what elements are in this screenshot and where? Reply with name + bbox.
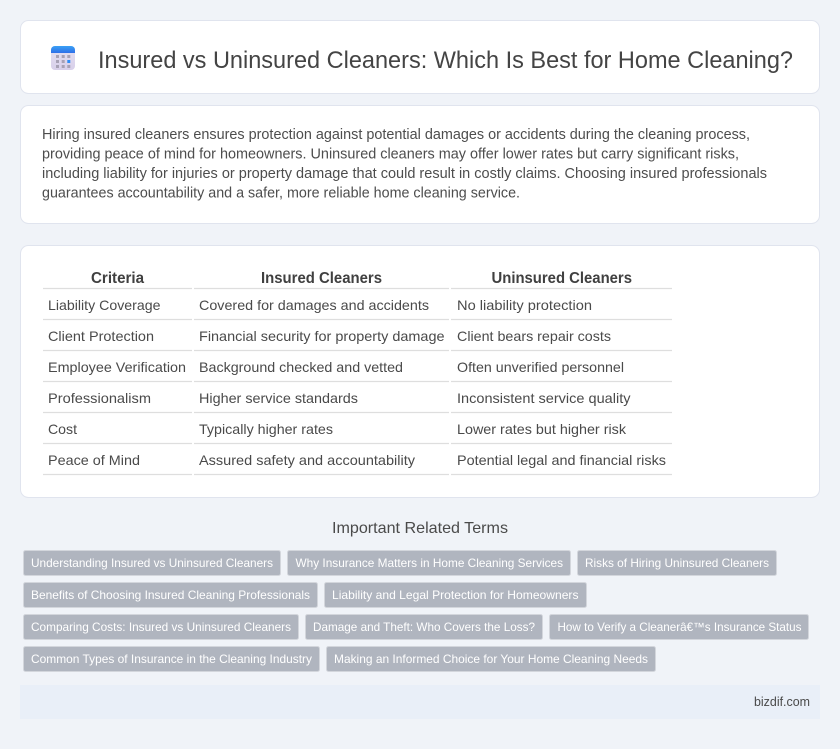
tag: Risks of Hiring Uninsured Cleaners (585, 556, 769, 570)
panel: summary (20, 106, 820, 224)
tag: Comparing Costs: Insured vs Uninsured Cleaners (31, 620, 291, 634)
tag (324, 582, 586, 608)
tag (326, 646, 656, 672)
tag (24, 614, 298, 640)
footer bar (20, 685, 820, 719)
table row: liability coverage: Covered for damages and accidents (199, 297, 429, 313)
text block: summary paragraph: including liability for injuries or property damage that could result in costly claims. Choosing insured professionals (42, 166, 767, 182)
table row: client protection: Financial security for property damage (199, 328, 445, 344)
tag: Why Insurance Matters in Home Cleaning Services (296, 556, 563, 570)
table row: employee verification: Employee Verification (48, 359, 186, 375)
tag (24, 582, 318, 608)
icon: calendar (51, 46, 75, 70)
tag: Making an Informed Choice for Your Home Cleaning Needs (334, 652, 648, 666)
text block: summary paragraph: Hiring insured cleaners ensures protection against potential damages or accidents during the cleaning process, (42, 127, 750, 143)
table row: cost: Cost (48, 421, 77, 437)
text block: summary paragraph: providing peace of mind for homeowners. Uninsured cleaners may offer lower rates but carry significant risks, (42, 146, 739, 162)
table row: peace of mind (48, 452, 666, 468)
table header (91, 270, 632, 287)
heading: related terms: Important Related Terms (332, 520, 508, 537)
tag (24, 550, 280, 576)
tag (550, 614, 808, 640)
table row: professionalism: Inconsistent service quality (457, 390, 630, 406)
tag: How to Verify a Cleanerâ€™s Insurance Status (558, 620, 802, 634)
table row: liability coverage: Liability Coverage (48, 297, 161, 313)
table row: professionalism: Professionalism (48, 390, 151, 406)
table row: employee verification: Often unverified personnel (457, 359, 624, 375)
panel: header (20, 20, 820, 94)
table row: liability coverage: No liability protection (457, 297, 592, 313)
table row: client protection: Client bears repair costs (457, 328, 611, 344)
tag: Common Types of Insurance in the Cleaning Industry (31, 652, 312, 666)
footer source: bizdif.com (754, 694, 810, 709)
table row: employee verification (48, 359, 624, 375)
table header: Insured Cleaners (261, 270, 382, 287)
table row: client protection: Client Protection (48, 328, 154, 344)
tag: Benefits of Choosing Insured Cleaning Professionals (31, 588, 310, 602)
tag (578, 550, 776, 576)
table row: client protection (48, 328, 611, 344)
table row: peace of mind: Peace of Mind (48, 452, 140, 468)
table row: peace of mind: Potential legal and financial risks (457, 452, 666, 468)
title: Insured vs Uninsured Cleaners: Which Is Best for Home Cleaning? (98, 47, 793, 74)
tag (24, 646, 320, 672)
tags: related terms (24, 550, 808, 672)
table row: peace of mind: Assured safety and accountability (199, 452, 415, 468)
table row: cost (48, 421, 627, 437)
tag: Damage and Theft: Who Covers the Loss? (313, 620, 535, 634)
table row: professionalism: Higher service standards (199, 390, 358, 406)
tag (288, 550, 570, 576)
table header: Criteria (91, 270, 144, 287)
table row: cost: Lower rates but higher risk (457, 421, 627, 437)
tag: Understanding Insured vs Uninsured Cleaners (31, 556, 273, 570)
tag (306, 614, 542, 640)
text block: summary paragraph (42, 127, 767, 202)
table row: professionalism (48, 390, 630, 406)
table row: liability coverage (48, 297, 592, 313)
text block: summary paragraph: guarantees accountability and a safer, more reliable home cleaning service. (42, 186, 520, 202)
table row: employee verification: Background checked and vetted (199, 359, 403, 375)
table row: cost: Typically higher rates (199, 421, 333, 437)
tag: Liability and Legal Protection for Homeowners (332, 588, 578, 602)
panel: comparison table (20, 246, 820, 498)
table header: Uninsured Cleaners (492, 270, 632, 287)
